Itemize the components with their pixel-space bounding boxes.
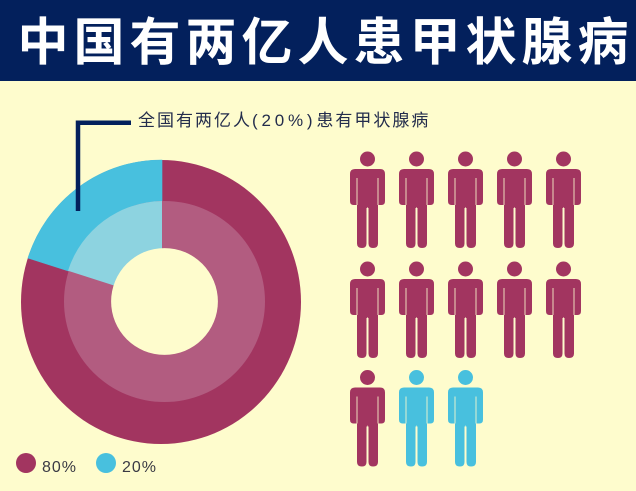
inner ring 20%: [68, 201, 162, 301]
outer ring 80%: [21, 160, 301, 444]
outer ring 20%: [28, 160, 162, 301]
legend: [16, 453, 157, 476]
legend: 80%: [42, 459, 77, 476]
donut chart: [21, 160, 301, 444]
legend: 20%: [122, 459, 157, 476]
title banner: 中国有两亿人患甲状腺病: [18, 14, 634, 71]
callout: leader line and label: 全国有两亿人(20%)患有甲状腺病: [138, 111, 430, 130]
donut hole: [111, 248, 218, 355]
inner ring 80%: [64, 201, 265, 402]
title banner: [0, 0, 636, 81]
pictogram: 13 people: [350, 152, 581, 466]
callout: leader line and label: [78, 111, 430, 211]
